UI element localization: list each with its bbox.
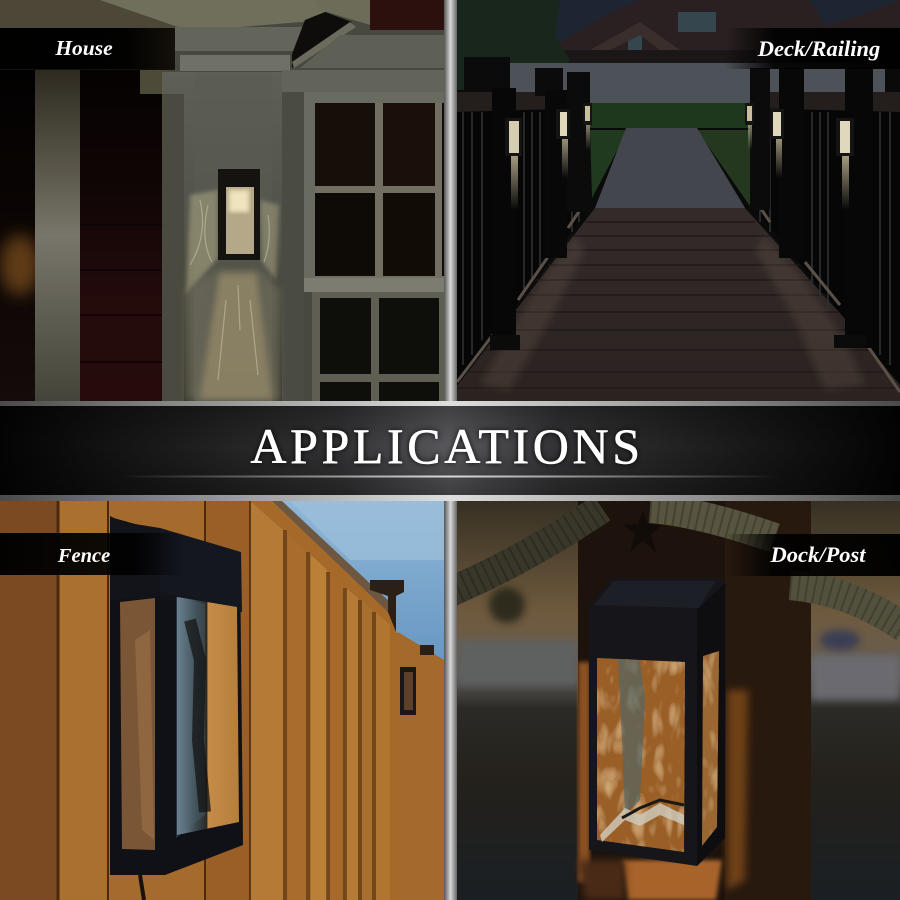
label: fence	[0, 533, 185, 575]
houses in background	[560, 0, 900, 50]
panel: deck railing	[457, 0, 900, 401]
icon: fence lantern	[110, 516, 243, 875]
title: APPLICATIONS	[250, 418, 644, 474]
dividers	[444, 0, 457, 900]
left railing	[457, 57, 590, 385]
icon: deck lanterns	[505, 103, 854, 210]
panel: house	[0, 0, 444, 401]
warm light on post	[578, 662, 748, 900]
right railing	[750, 68, 900, 392]
window: lower	[312, 292, 444, 401]
label: deck/railing	[725, 28, 900, 69]
rope	[450, 508, 900, 628]
label: dock/post	[725, 534, 900, 576]
label: fence: Fence	[57, 545, 110, 567]
label: house	[0, 28, 175, 69]
label: deck/railing: Deck/Railing	[757, 36, 880, 61]
window: upper	[315, 103, 444, 278]
lamp light on wall	[186, 190, 280, 401]
label: house: House	[54, 36, 113, 60]
banner: applications	[0, 401, 900, 501]
icon: dock lantern	[589, 578, 726, 866]
tree	[457, 0, 570, 90]
label: dock/post: Dock/Post	[770, 542, 866, 567]
pillar	[140, 27, 302, 401]
icon: house wall lantern	[218, 169, 260, 260]
wood boards	[0, 501, 444, 900]
panel: dock post	[450, 501, 900, 900]
panel: fence	[0, 501, 444, 900]
